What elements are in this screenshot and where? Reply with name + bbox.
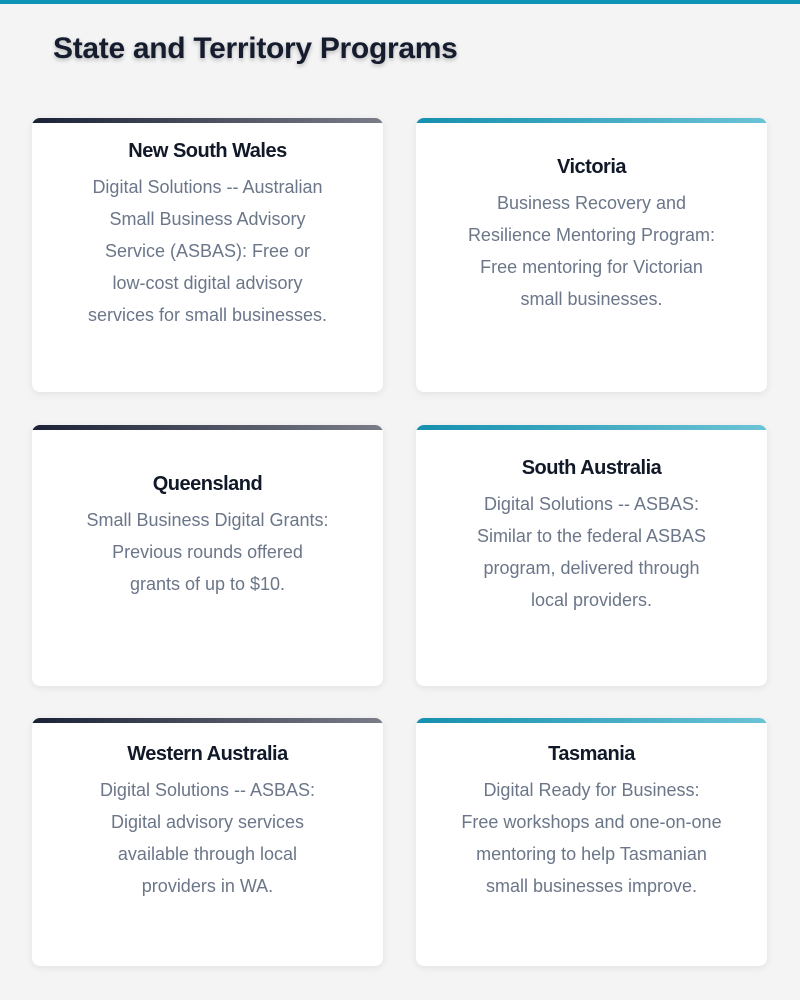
text: Queensland: Small Business Digital Grants: — [86, 510, 329, 530]
text: Queensland: grants of up to $10. — [130, 574, 285, 594]
text: Victoria: Free mentoring for Victorian — [480, 257, 703, 277]
text: Victoria — [468, 193, 715, 309]
text: Western Australia — [100, 780, 315, 896]
text: NSW: Small Business Advisory — [109, 209, 306, 229]
panel: New South Wales — [32, 118, 383, 392]
heading: South Australia: South Australia — [522, 456, 661, 478]
text: NSW: Digital Solutions -- Australian — [92, 177, 323, 197]
text: Queensland: Previous rounds offered — [112, 542, 303, 562]
text: South Australia: Digital Solutions -- ASBAS: — [484, 494, 699, 514]
text: Victoria: Resilience Mentoring Program: — [468, 225, 715, 245]
text: Victoria: Business Recovery and — [497, 193, 686, 213]
text: Tasmania: mentoring to help Tasmanian — [476, 844, 707, 864]
text: Western Australia: Digital advisory services — [111, 812, 304, 832]
text: South Australia: Similar to the federal ASBAS — [477, 526, 706, 546]
text: Western Australia: Digital Solutions -- ASBAS: — [100, 780, 315, 800]
heading: Queensland: Queensland — [153, 472, 262, 494]
heading: Tasmania: Tasmania — [548, 743, 635, 765]
heading: Victoria: Victoria — [557, 156, 626, 178]
text: NSW: Service (ASBAS): Free or — [105, 241, 310, 261]
text: Tasmania: Digital Ready for Business: — [483, 780, 700, 800]
text: NSW — [88, 177, 327, 325]
title: State and Territory Programs — [53, 32, 458, 65]
heading: Western Australia: Western Australia — [127, 743, 288, 765]
panel: Western Australia — [32, 718, 383, 966]
panel: Queensland — [32, 425, 383, 686]
panel: Victoria — [416, 118, 767, 392]
text: Victoria: small businesses. — [520, 289, 663, 309]
panel: Tasmania — [416, 718, 767, 966]
text: NSW: low-cost digital advisory — [112, 273, 303, 293]
text: Tasmania: small businesses improve. — [486, 876, 697, 896]
panel: South Australia — [416, 425, 767, 686]
top accent bar — [0, 0, 800, 4]
text: South Australia: local providers. — [531, 590, 652, 610]
text: Tasmania: Free workshops and one-on-one — [461, 812, 722, 832]
heading: NSW: New South Wales — [128, 140, 287, 162]
text: South Australia — [477, 494, 706, 610]
text: NSW: services for small businesses. — [88, 305, 327, 325]
text: Tasmania — [461, 780, 722, 896]
text: South Australia: program, delivered through — [483, 558, 700, 578]
text: Western Australia: providers in WA. — [142, 876, 273, 896]
text: Queensland — [86, 510, 329, 594]
text: Western Australia: available through local — [118, 844, 297, 864]
